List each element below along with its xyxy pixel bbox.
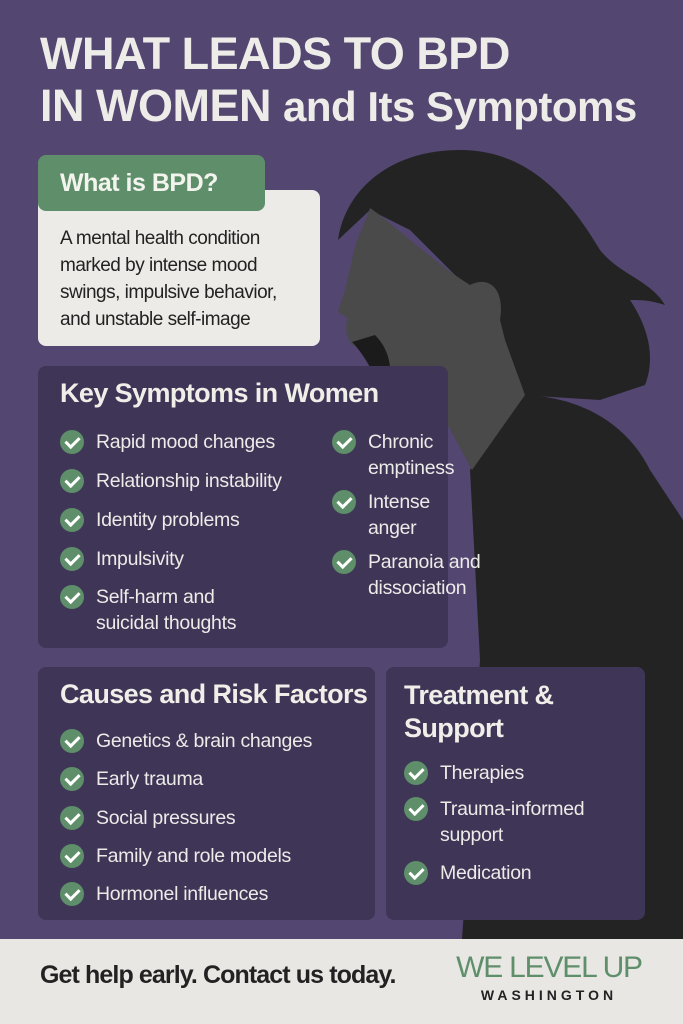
panel: treatment: Trauma-informed (440, 798, 584, 820)
panel: causes (38, 667, 375, 920)
logo: WE LEVEL UP (456, 951, 642, 984)
panel: key symptoms: Impulsivity (96, 548, 184, 570)
logo (456, 951, 642, 1003)
logo: WASHINGTON (481, 987, 617, 1003)
panel: treatment (386, 667, 645, 920)
treatment list: Therapies (440, 762, 524, 784)
panel: causes: Family and role models (96, 845, 291, 867)
panel: causes: Hormonel influences (96, 883, 268, 905)
footer (0, 939, 683, 1024)
title: IN WOMEN and Its Symptoms (40, 80, 637, 131)
definition text: marked by intense mood (60, 255, 257, 276)
panel: key symptoms: emptiness (368, 457, 454, 479)
panel: causes: Early trauma (96, 768, 203, 790)
panel: treatment: Medication (440, 862, 531, 884)
heading tab (38, 155, 265, 211)
definition text: A mental health condition (60, 228, 260, 249)
definition text: swings, impulsive behavior, (60, 282, 277, 303)
panel: what is BPD (38, 155, 320, 346)
call to action: Get help early. Contact us today. (40, 961, 396, 989)
title: WHAT LEADS TO BPD (40, 28, 510, 79)
panel: key symptoms (38, 366, 448, 648)
panel: key symptoms: Relationship instability (96, 470, 282, 492)
panel: key symptoms: Paranoia and (368, 551, 480, 573)
heading: Support (404, 713, 503, 743)
panel: key symptoms: dissociation (368, 577, 466, 599)
causes list: Genetics & brain changes (96, 730, 312, 752)
heading: Treatment & (404, 680, 553, 710)
panel: treatment: support (440, 824, 503, 846)
symptom list: Rapid mood changes (96, 431, 275, 453)
heading (404, 680, 554, 743)
heading tab: What is BPD? (60, 169, 218, 197)
definition box (38, 190, 320, 346)
treatment list (404, 761, 524, 785)
definition text: and unstable self-image (60, 309, 250, 330)
panel: causes: Social pressures (96, 807, 235, 829)
panel: key symptoms: anger (368, 517, 416, 539)
definition text (60, 228, 277, 330)
heading: Causes and Risk Factors (60, 679, 367, 709)
panel: key symptoms: Intense (368, 491, 430, 513)
title (40, 28, 637, 131)
panel: key symptoms: Self-harm and (96, 586, 215, 608)
panel: key symptoms: Identity problems (96, 509, 239, 531)
heading: Key Symptoms in Women (60, 378, 378, 408)
panel: key symptoms: Chronic (368, 431, 433, 453)
panel: key symptoms: suicidal thoughts (96, 612, 236, 634)
